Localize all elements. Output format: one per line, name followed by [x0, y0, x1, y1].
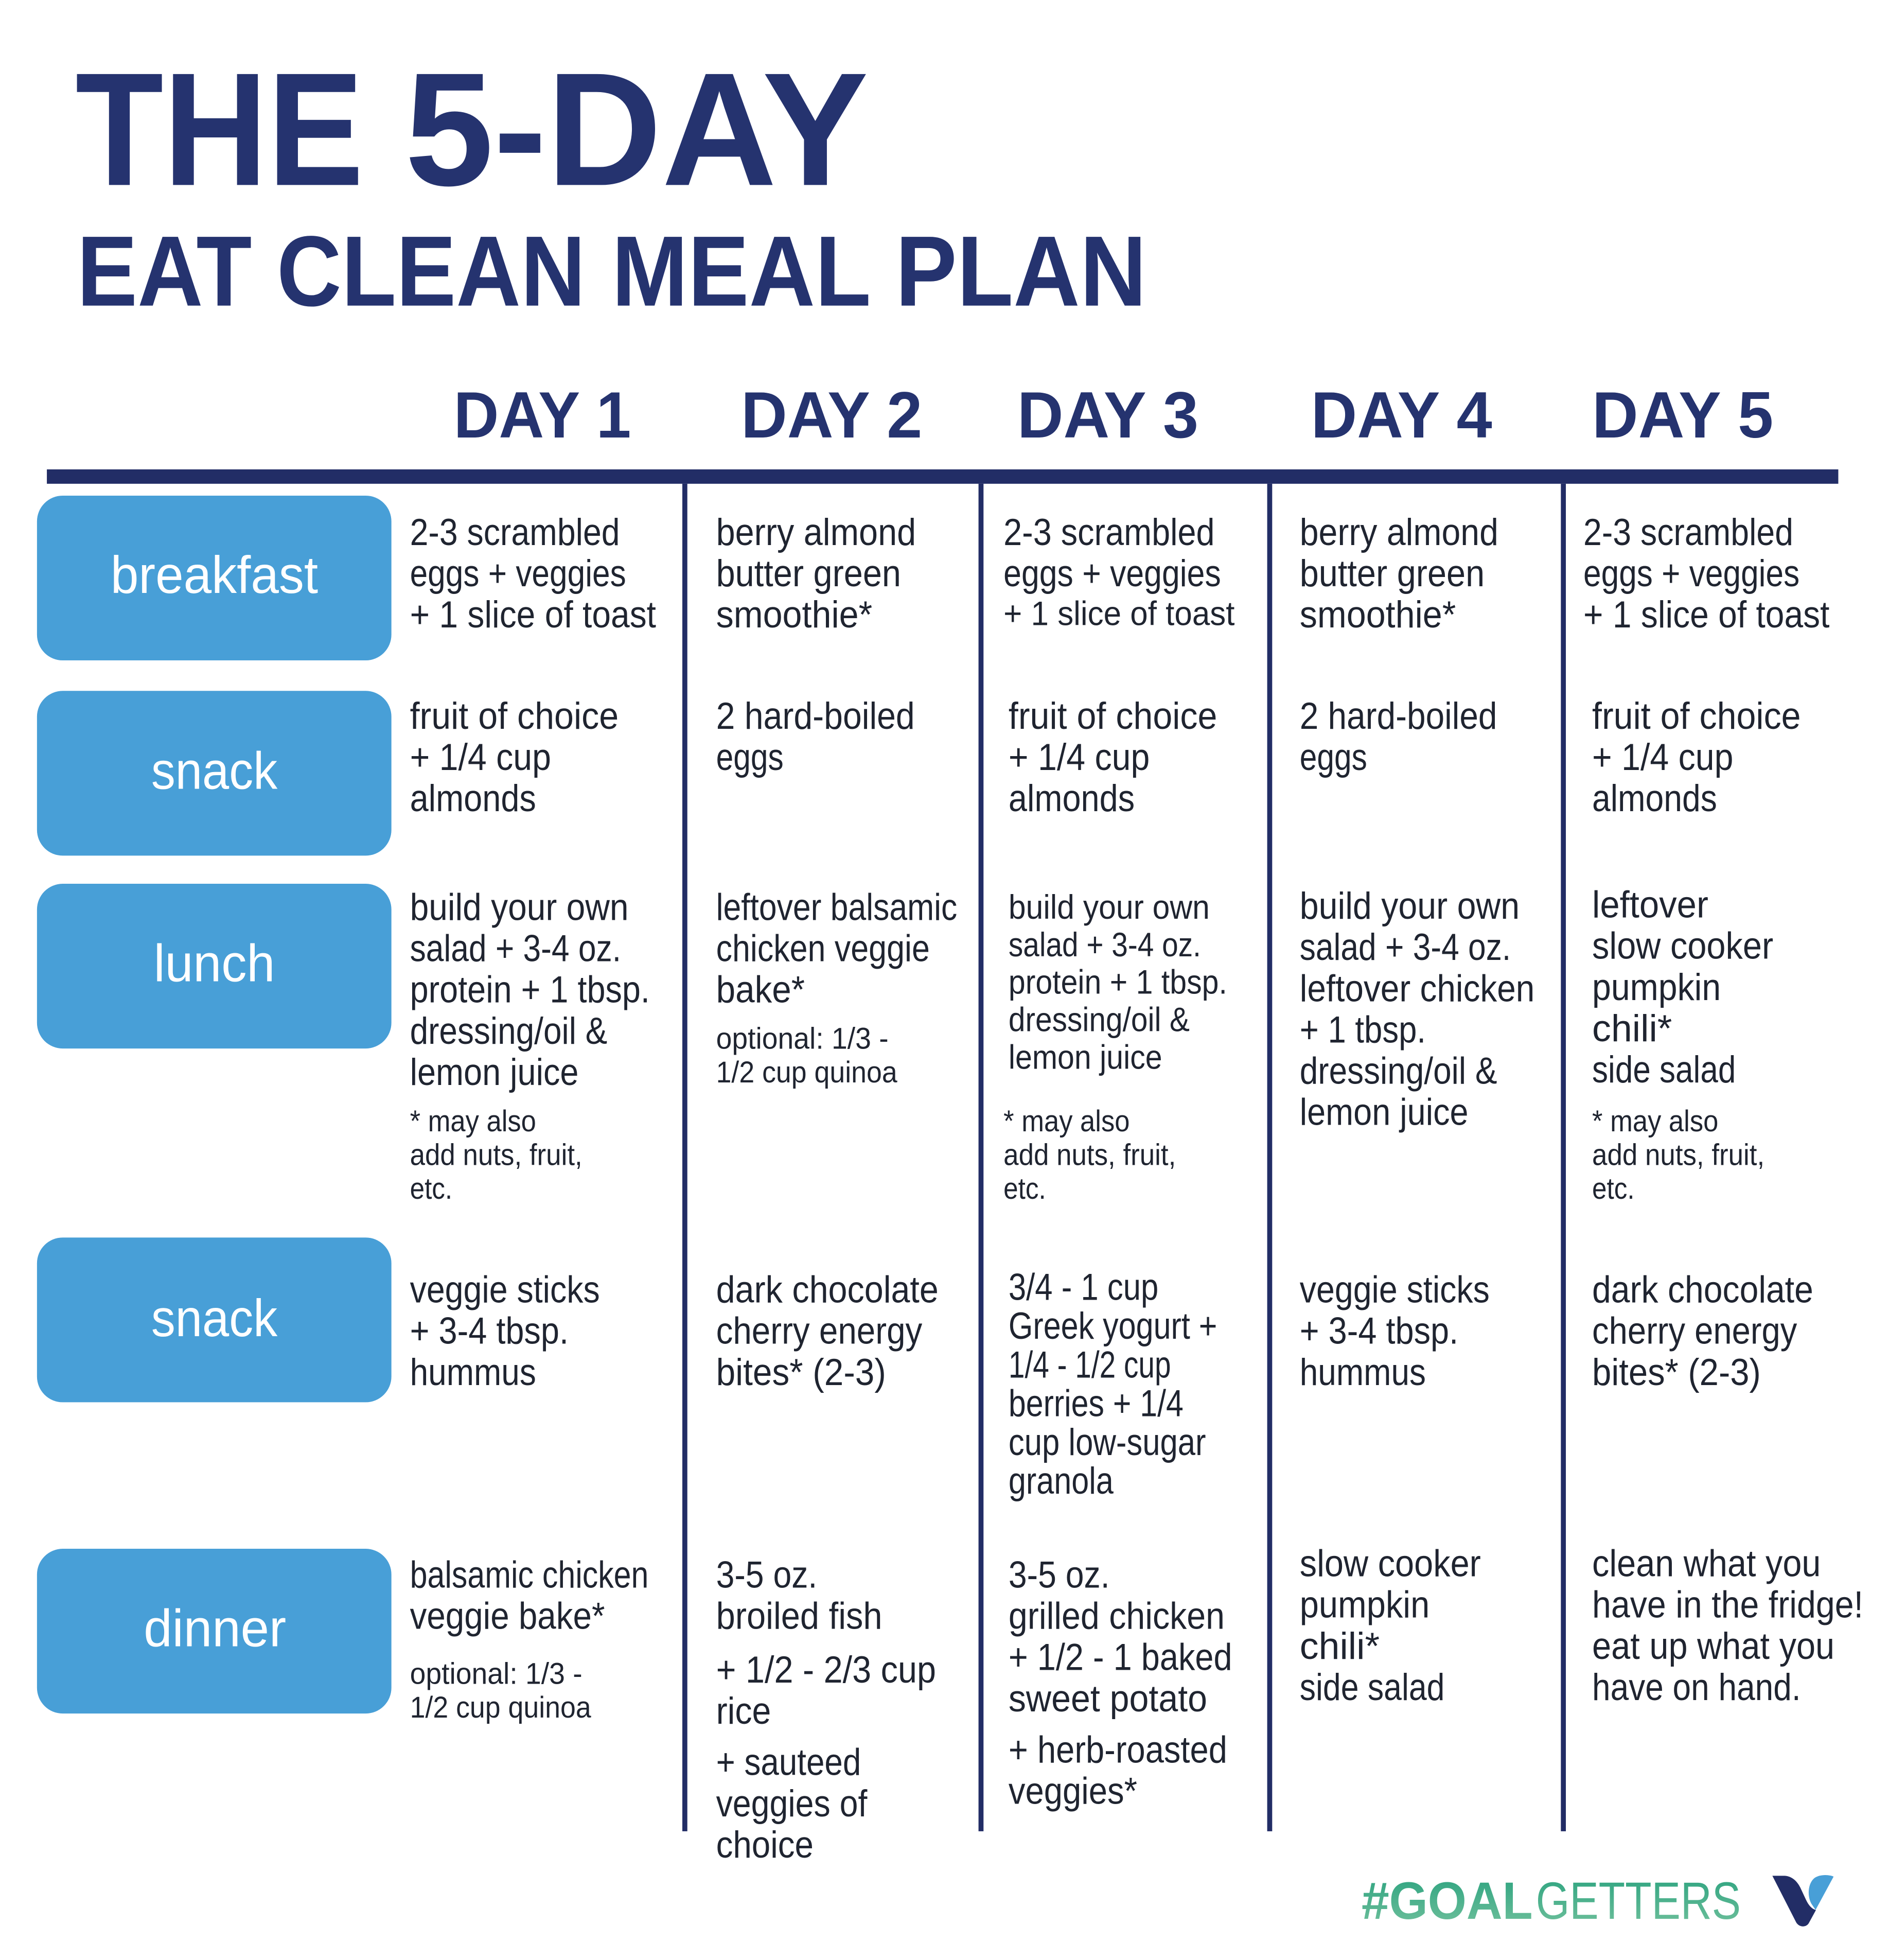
- day 1 breakfast: 2-3 scrambled: [410, 512, 620, 553]
- day 2 dinner: choice: [716, 1824, 814, 1866]
- day 3 lunch: etc.: [1003, 1172, 1046, 1205]
- day 4 afternoon snack: + 3-4 tbsp.: [1300, 1310, 1458, 1352]
- day 4 lunch: salad + 3-4 oz.: [1300, 926, 1511, 968]
- day 5 afternoon snack: bites* (2-3): [1592, 1352, 1761, 1393]
- day 2 breakfast: smoothie*: [716, 594, 872, 636]
- label: lunch: [37, 884, 392, 1048]
- day 3 lunch: [1003, 888, 1227, 1205]
- day 5 afternoon snack: dark chocolate: [1592, 1269, 1813, 1311]
- icon: V logo: [1772, 1875, 1833, 1927]
- day 4 dinner: chili*: [1300, 1625, 1380, 1667]
- day 2 dinner: + 1/2 - 2/3 cup: [716, 1649, 936, 1691]
- day 1 breakfast: + 1 slice of toast: [410, 594, 656, 636]
- day column headings: [454, 379, 1773, 452]
- label: dinner: [37, 1549, 392, 1713]
- day 2 dinner: broiled fish: [716, 1595, 882, 1637]
- day 1 dinner: [410, 1554, 648, 1724]
- day 3 dinner: [1009, 1554, 1232, 1812]
- day 5 lunch: etc.: [1592, 1172, 1635, 1205]
- title: 5-DAY: [405, 39, 869, 219]
- day 5 dinner: eat up what you: [1592, 1625, 1834, 1667]
- day 5 snack: almonds: [1592, 778, 1717, 819]
- day 4 snack: eggs: [1300, 737, 1367, 778]
- day 2 dinner: 3-5 oz.: [716, 1554, 817, 1596]
- day 1 dinner: 1/2 cup quinoa: [410, 1691, 591, 1724]
- day 3 snack: [1009, 695, 1217, 819]
- day 4 afternoon snack: [1300, 1269, 1490, 1393]
- label: snack: [37, 1237, 392, 1402]
- day 2 dinner: rice: [716, 1690, 771, 1732]
- day 4 snack: 2 hard-boiled: [1300, 695, 1497, 737]
- day 3 afternoon snack: cup low-sugar: [1009, 1422, 1206, 1463]
- day 4 lunch: [1300, 885, 1534, 1133]
- day 4 dinner: slow cooker: [1300, 1543, 1481, 1584]
- label: breakfast: breakfast: [111, 546, 318, 604]
- day 2 breakfast: [716, 512, 916, 636]
- day 4 dinner: side salad: [1300, 1667, 1444, 1708]
- day 1 afternoon snack: hummus: [410, 1352, 536, 1393]
- day 4 snack: [1300, 695, 1497, 778]
- day 2 snack: eggs: [716, 737, 784, 778]
- day 3 afternoon snack: [1009, 1267, 1217, 1502]
- day 5 lunch: add nuts, fruit,: [1592, 1138, 1764, 1171]
- title: [75, 39, 1146, 327]
- day 2 dinner: [716, 1554, 936, 1866]
- title: PLAN: [895, 216, 1146, 327]
- day 2 afternoon snack: dark chocolate: [716, 1269, 939, 1311]
- day 4 lunch: lemon juice: [1300, 1092, 1469, 1133]
- day 3 dinner: + herb-roasted: [1009, 1729, 1227, 1771]
- day 2 lunch: chicken veggie: [716, 928, 930, 970]
- day 1 snack: + 1/4 cup: [410, 737, 551, 778]
- row: morning snack: [37, 691, 1801, 855]
- day 5 lunch: pumpkin: [1592, 967, 1721, 1008]
- day 4 breakfast: smoothie*: [1300, 594, 1456, 636]
- day 3 lunch: add nuts, fruit,: [1003, 1138, 1176, 1171]
- day 5 dinner: clean what you: [1592, 1543, 1821, 1584]
- day 1 lunch: add nuts, fruit,: [410, 1138, 582, 1171]
- day 3 breakfast: eggs + veggies: [1003, 553, 1221, 594]
- day 4 lunch: leftover chicken: [1300, 968, 1534, 1009]
- day 5 dinner: have in the fridge!: [1592, 1584, 1863, 1626]
- day 1 lunch: salad + 3-4 oz.: [410, 928, 621, 970]
- day column headings: DAY 3: [1017, 379, 1198, 452]
- label: snack: snack: [151, 741, 278, 800]
- day 3 snack: fruit of choice: [1009, 695, 1217, 737]
- day 5 lunch: leftover: [1592, 884, 1708, 926]
- day 1 breakfast: [410, 512, 656, 636]
- day 3 breakfast: [1003, 512, 1234, 632]
- day 3 breakfast: 2-3 scrambled: [1003, 512, 1215, 553]
- day 3 lunch: lemon juice: [1009, 1038, 1162, 1076]
- day 2 snack: [716, 695, 915, 778]
- day 2 lunch: 1/2 cup quinoa: [716, 1056, 897, 1089]
- day 1 snack: fruit of choice: [410, 695, 619, 737]
- day 5 breakfast: eggs + veggies: [1583, 553, 1799, 594]
- day 3 dinner: sweet potato: [1009, 1678, 1207, 1720]
- label: snack: snack: [151, 1289, 278, 1347]
- hashtag: #GOALGETTERS: [1362, 1871, 1741, 1930]
- day 1 lunch: lemon juice: [410, 1052, 578, 1093]
- day 5 dinner: have on hand.: [1592, 1667, 1801, 1708]
- day 3 lunch: salad + 3-4 oz.: [1009, 926, 1201, 964]
- day 3 afternoon snack: 3/4 - 1 cup: [1009, 1267, 1158, 1308]
- day 5 afternoon snack: [1592, 1269, 1813, 1393]
- day 2 breakfast: butter green: [716, 553, 901, 594]
- title: CLEAN: [277, 216, 586, 327]
- row: afternoon snack: [37, 1237, 1813, 1502]
- day 2 afternoon snack: cherry energy: [716, 1310, 923, 1352]
- day 2 afternoon snack: bites* (2-3): [716, 1352, 886, 1393]
- day 5 breakfast: + 1 slice of toast: [1583, 594, 1829, 636]
- day 1 dinner: optional: 1/3 -: [410, 1657, 582, 1690]
- hashtag: #GOALGETTERS: GETTERS: [1536, 1871, 1741, 1930]
- day 3 lunch: protein + 1 tbsp.: [1009, 964, 1227, 1001]
- day 1 afternoon snack: veggie sticks: [410, 1269, 600, 1311]
- day 1 lunch: etc.: [410, 1172, 452, 1205]
- day 1 afternoon snack: [410, 1269, 600, 1393]
- label: breakfast: [37, 496, 392, 660]
- day 4 afternoon snack: veggie sticks: [1300, 1269, 1490, 1311]
- day 3 dinner: veggies*: [1009, 1770, 1137, 1812]
- day 3 afternoon snack: granola: [1009, 1460, 1114, 1502]
- day 1 lunch: dressing/oil &: [410, 1010, 607, 1052]
- day 3 dinner: + 1/2 - 1 baked: [1009, 1637, 1232, 1678]
- label: dinner: dinner: [144, 1599, 286, 1657]
- day 4 dinner: [1300, 1543, 1481, 1708]
- day 1 breakfast: eggs + veggies: [410, 553, 626, 594]
- day 4 breakfast: butter green: [1300, 553, 1485, 594]
- day 5 lunch: side salad: [1592, 1049, 1736, 1091]
- day 5 snack: [1592, 695, 1801, 819]
- day 5 dinner: [1592, 1543, 1863, 1708]
- day 3 snack: + 1/4 cup: [1009, 737, 1150, 778]
- day column headings: DAY 1: [454, 379, 631, 452]
- day 3 afternoon snack: berries + 1/4: [1009, 1383, 1184, 1425]
- day 1 lunch: [410, 886, 650, 1205]
- title: THE: [75, 39, 364, 219]
- day 4 lunch: dressing/oil &: [1300, 1051, 1497, 1092]
- day 3 afternoon snack: Greek yogurt +: [1009, 1305, 1217, 1347]
- day 3 lunch: * may also: [1003, 1105, 1129, 1138]
- day 3 snack: almonds: [1009, 778, 1135, 819]
- day 5 lunch: * may also: [1592, 1105, 1718, 1138]
- row: dinner: [37, 1543, 1863, 1866]
- row: lunch: [37, 884, 1773, 1205]
- day column headings: DAY 4: [1311, 379, 1492, 452]
- day 3 afternoon snack: 1/4 - 1/2 cup: [1009, 1344, 1171, 1386]
- day 4 lunch: + 1 tbsp.: [1300, 1009, 1426, 1051]
- row: breakfast: [37, 496, 1829, 660]
- label: snack: [37, 691, 392, 855]
- day 3 dinner: 3-5 oz.: [1009, 1554, 1110, 1596]
- day 5 breakfast: [1583, 512, 1829, 636]
- day 5 snack: + 1/4 cup: [1592, 737, 1733, 778]
- day 4 breakfast: berry almond: [1300, 512, 1498, 553]
- day 3 breakfast: + 1 slice of toast: [1003, 594, 1234, 632]
- day 2 lunch: [716, 886, 957, 1089]
- day 1 dinner: veggie bake*: [410, 1595, 605, 1637]
- day 5 lunch: slow cooker: [1592, 925, 1773, 967]
- day 5 snack: fruit of choice: [1592, 695, 1801, 737]
- day 2 dinner: + sauteed: [716, 1742, 861, 1783]
- day 5 afternoon snack: cherry energy: [1592, 1310, 1797, 1352]
- day 1 snack: almonds: [410, 778, 536, 819]
- day 5 lunch: chili*: [1592, 1008, 1672, 1049]
- day 2 afternoon snack: [716, 1269, 939, 1393]
- day 2 lunch: optional: 1/3 -: [716, 1022, 889, 1056]
- title: MEAL: [612, 216, 871, 327]
- day 1 snack: [410, 695, 619, 819]
- day 2 dinner: veggies of: [716, 1783, 868, 1825]
- label: lunch: lunch: [154, 934, 275, 992]
- day 2 breakfast: berry almond: [716, 512, 916, 553]
- day 3 lunch: build your own: [1009, 888, 1210, 926]
- day 2 snack: 2 hard-boiled: [716, 695, 915, 737]
- day 1 lunch: build your own: [410, 886, 629, 928]
- day 4 afternoon snack: hummus: [1300, 1352, 1426, 1393]
- day 1 lunch: protein + 1 tbsp.: [410, 969, 650, 1011]
- day 2 lunch: leftover balsamic: [716, 886, 957, 928]
- day 1 afternoon snack: + 3-4 tbsp.: [410, 1310, 569, 1352]
- hashtag: #GOALGETTERS: #GOAL: [1362, 1871, 1533, 1930]
- day 1 dinner: balsamic chicken: [410, 1554, 648, 1596]
- day 4 breakfast: [1300, 512, 1498, 636]
- day 2 lunch: bake*: [716, 969, 805, 1011]
- title: EAT: [77, 216, 252, 327]
- day 4 dinner: pumpkin: [1300, 1584, 1429, 1626]
- day 1 lunch: * may also: [410, 1105, 536, 1138]
- day 4 lunch: build your own: [1300, 885, 1520, 927]
- day column headings: DAY 2: [741, 379, 922, 452]
- day 3 dinner: grilled chicken: [1009, 1595, 1225, 1637]
- day 3 lunch: dressing/oil &: [1009, 1001, 1190, 1039]
- day column headings: DAY 5: [1592, 379, 1773, 452]
- day 5 lunch: [1592, 884, 1773, 1205]
- day 5 breakfast: 2-3 scrambled: [1583, 512, 1793, 553]
